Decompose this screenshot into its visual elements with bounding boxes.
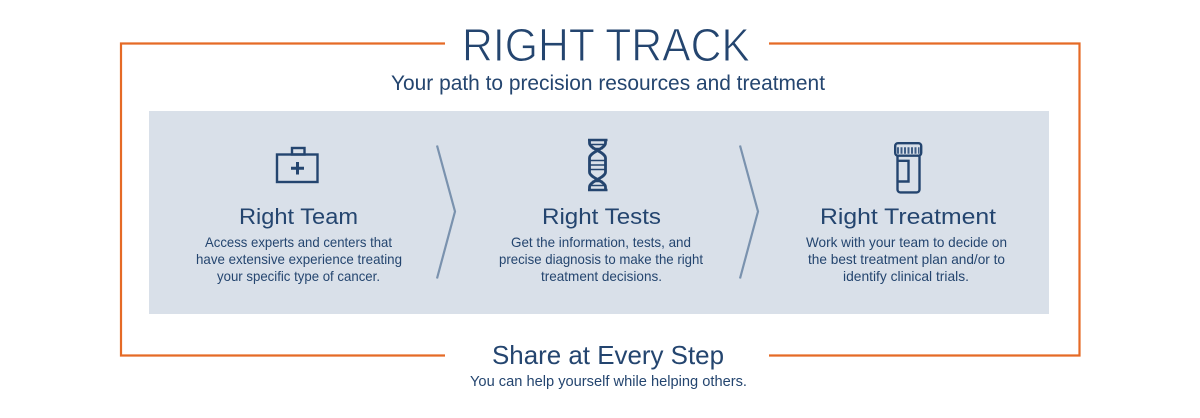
panel background	[149, 111, 1049, 314]
description: right team	[196, 234, 402, 284]
heading: right treatment: Right Treatment	[820, 204, 996, 229]
heading: right tests: Right Tests	[542, 204, 661, 229]
description: right treatment	[806, 234, 1007, 284]
description: right treatment: identify clinical trials.	[843, 268, 969, 284]
description: right tests	[499, 234, 703, 284]
description: right tests: treatment decisions.	[541, 268, 662, 284]
icon: DNA helix	[588, 139, 608, 191]
description: right tests: Get the information, tests, and	[511, 234, 691, 250]
footer heading: Share at Every Step	[492, 340, 724, 370]
subtitle: Your path to precision resources and treatment	[391, 72, 825, 95]
icon: medical kit	[277, 148, 318, 182]
description: right treatment: Work with your team to decide on	[806, 234, 1007, 250]
description: right tests: precise diagnosis to make the right	[499, 251, 703, 267]
description: right team: your specific type of cancer.	[217, 268, 380, 284]
title: RIGHT TRACK	[462, 19, 750, 71]
heading: right team: Right Team	[239, 204, 358, 229]
arrow: team to tests	[437, 146, 455, 278]
description: right team: Access experts and centers that	[205, 234, 392, 250]
panel: three steps	[149, 111, 1049, 314]
icon: pill bottle	[895, 143, 921, 192]
footer subtext: You can help yourself while helping others.	[470, 373, 747, 390]
orange frame	[121, 44, 1080, 356]
step: right treatment	[806, 204, 1007, 284]
arrow: tests to treatment	[740, 146, 758, 278]
step: right tests	[499, 204, 703, 284]
description: right team: have extensive experience treating	[196, 251, 402, 267]
step: right team	[196, 204, 402, 284]
description: right treatment: the best treatment plan and/or to	[808, 251, 1005, 267]
